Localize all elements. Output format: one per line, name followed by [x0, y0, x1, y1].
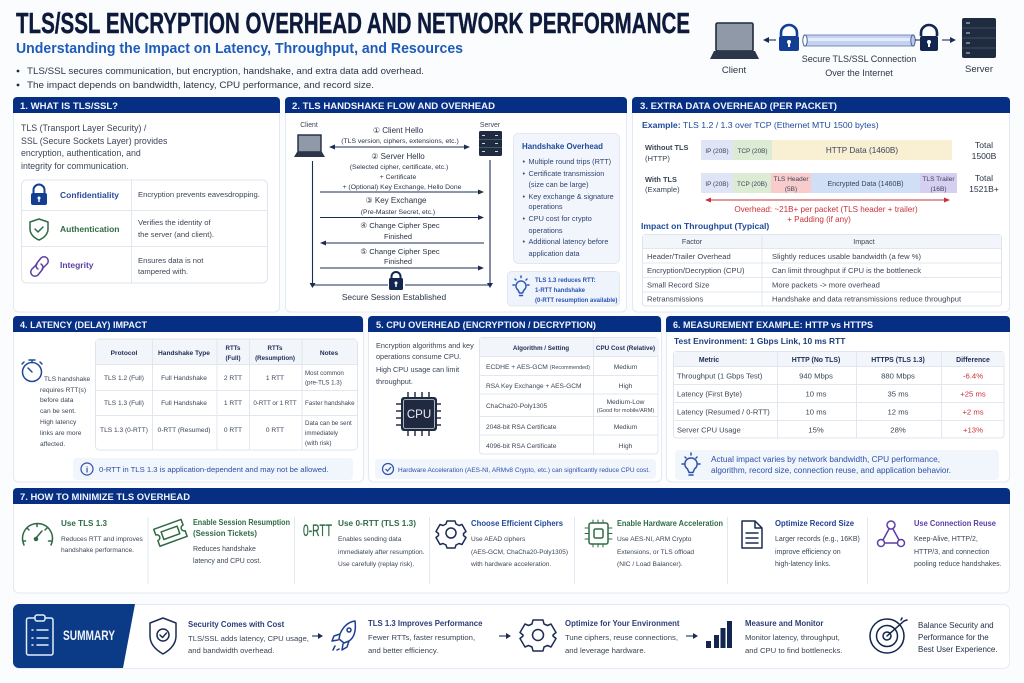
overhead note — [734, 205, 918, 224]
tip: session resumption: latency and CPU cost. — [193, 558, 261, 565]
throughput table: Small Record Size — [647, 280, 709, 290]
tip: record size: Larger records (e.g., 16KB) — [775, 536, 860, 543]
tip: hardware acceleration — [585, 519, 723, 568]
icon: ticket — [154, 519, 187, 546]
summary label block: SUMMARY — [63, 627, 115, 643]
step 3: ③ Key Exchange — [366, 196, 427, 205]
icon: light bulb — [513, 276, 529, 296]
server column: Server — [480, 122, 501, 129]
arrow — [499, 633, 511, 639]
summary: balance security and performance: Balance Security and — [918, 621, 994, 630]
icon: CPU chip: CPU — [407, 409, 431, 421]
latency table: 1 RTT — [224, 400, 242, 407]
row: integrity: Integrity — [60, 260, 94, 270]
summary: security comes with cost: and bandwidth overhead. — [188, 646, 274, 655]
latency table: (with risk) — [305, 440, 331, 447]
tip: 0-RTT: Use 0-RTT (TLS 1.3) — [338, 519, 416, 528]
connection label: Secure TLS/SSL Connection — [802, 54, 916, 64]
row: authentication: Verifies the identity of — [138, 218, 212, 227]
tip: 0-RTT: Use carefully (replay risk). — [338, 561, 414, 568]
tip: efficient ciphers — [436, 519, 568, 568]
cpu cost table: High — [619, 443, 633, 450]
summary: security comes with cost: TLS/SSL adds latency, CPU usage, — [188, 634, 309, 643]
left arrow — [763, 37, 776, 43]
step 4 — [320, 221, 484, 246]
row: integrity — [60, 256, 204, 276]
handshake overhead box: • — [522, 192, 526, 201]
tip: connection reuse: Keep-Alive, HTTP/2, — [914, 536, 978, 543]
session established label: Secure Session Established — [342, 292, 446, 302]
tip: efficient ciphers: Use AEAD ciphers — [471, 536, 526, 543]
secure connection diagram — [710, 18, 996, 78]
tip: efficient ciphers: Choose Efficient Ciphers — [471, 519, 564, 528]
cpu cost table: ECDHE + AES-GCM (Recommended) — [486, 364, 590, 371]
tip: record size — [742, 519, 860, 568]
measurement table: Latency (Resumed / 0-RTT) — [677, 408, 770, 416]
tip: efficient ciphers: with hardware acceleration. — [470, 561, 551, 568]
intro bullets: The impact depends on bandwidth, latency, CPU performance, and record size. — [27, 80, 374, 91]
packet with TLS: (Example) — [645, 185, 680, 194]
latency table: TLS 1.2 (Full) — [104, 375, 144, 382]
latency table — [95, 339, 358, 450]
step 4: Finished — [384, 232, 412, 241]
cpu explanation — [376, 341, 474, 386]
cpu cost table: ChaCha20-Poly1305 — [486, 403, 548, 410]
packet with TLS: With TLS — [645, 175, 677, 184]
heading: 6. MEASUREMENT EXAMPLE: HTTP vs HTTPS — [673, 320, 874, 331]
packet with TLS: TLS Trailer — [922, 176, 955, 183]
icon: lock — [31, 185, 47, 205]
TLS 1.3 callout — [508, 272, 620, 306]
tip: hardware acceleration: (NIC / Load Balancer). — [617, 561, 683, 568]
latency explanation: TLS handshake — [44, 376, 91, 383]
handshake overhead box: operations — [528, 226, 563, 235]
cpu cost table: CPU Cost (Relative) — [596, 345, 655, 352]
latency explanation: before data — [40, 397, 74, 404]
step 2: (Selected cipher, certificate, etc.) — [350, 164, 448, 171]
latency table: immediately — [305, 430, 339, 437]
latency table: 0-RTT (Resumed) — [158, 427, 210, 434]
summary: optimize for environment: and leverage hardware. — [565, 646, 646, 655]
throughput table: Header/Trailer Overhead — [647, 252, 731, 261]
packet without TLS: IP (20B) — [705, 148, 729, 155]
icon: shield check — [30, 219, 48, 240]
measurement table: 35 ms — [888, 390, 909, 398]
step 1: (TLS version, ciphers, extensions, etc.) — [341, 138, 459, 145]
latency table: RTTs — [225, 345, 241, 352]
step 2: ② Server Hello — [371, 152, 425, 161]
heading: 4. LATENCY (DELAY) IMPACT — [20, 320, 147, 331]
overhead note: + Padding (if any) — [787, 215, 851, 224]
icon: gauge — [22, 523, 53, 545]
tip: connection reuse: HTTP/3, and connection — [914, 549, 990, 556]
icon: light bulb — [682, 453, 700, 475]
tip: session resumption — [154, 518, 290, 565]
TLS 1.3 callout: 1-RTT handshake — [535, 288, 586, 294]
tip: hardware acceleration: Extensions, or TLS offload — [617, 549, 694, 556]
0-RTT note — [73, 458, 353, 480]
cpu cost table: 4096-bit RSA Certificate — [486, 443, 557, 450]
measurement table: HTTP (No TLS) — [792, 357, 840, 364]
summary: TLS 1.3 improves performance: TLS 1.3 Improves Performance — [368, 619, 483, 628]
throughput table: Slightly reduces usable bandwidth (a few %) — [772, 252, 921, 261]
packet with TLS: (16B) — [930, 186, 947, 193]
cpu cost table: (Good for mobile/ARM) — [597, 408, 654, 414]
cpu cost table: Medium — [614, 424, 638, 431]
packet without TLS: Total — [975, 140, 993, 150]
handshake overhead box: Key exchange & signature — [528, 192, 614, 201]
tip: connection reuse: Use Connection Reuse — [914, 519, 997, 528]
cpu cost table: Algorithm / Setting — [513, 345, 569, 352]
0-RTT note: i — [86, 464, 88, 474]
overhead note: Overhead: ~21B+ per packet (TLS header + trailer) — [734, 205, 918, 214]
right arrow — [942, 37, 956, 43]
latency explanation: High latency — [40, 419, 77, 426]
tip: 0-RTT — [303, 519, 425, 568]
latency table: Most common — [305, 370, 344, 377]
panel 6: measurement example — [666, 316, 1010, 482]
latency table: Data can be sent — [305, 420, 352, 427]
title: TLS/SSL ENCRYPTION OVERHEAD AND NETWORK PERFORMANCE — [16, 8, 690, 40]
handshake overhead box: • — [522, 237, 526, 246]
icon: client laptop — [710, 23, 759, 59]
packet with TLS: (5B) — [785, 186, 797, 193]
row: confidentiality — [60, 190, 260, 200]
measurement table: +2 ms — [962, 408, 984, 416]
arrow — [312, 633, 323, 639]
latency table: 0-RTT or 1 RTT — [253, 400, 297, 407]
throughput table: Retransmissions — [647, 294, 703, 304]
connection label — [802, 54, 916, 78]
intro text: TLS (Transport Layer Security) / — [21, 123, 147, 133]
tip: 0-RTT: Enables sending data — [338, 536, 402, 543]
intro text: SSL (Secure Sockets Layer) provides — [21, 136, 168, 146]
icon: lock blue — [779, 25, 799, 51]
summary label block — [13, 604, 135, 668]
icon: gear — [520, 620, 556, 651]
icon: chain link — [31, 257, 48, 276]
step 5: ⑤ Change Cipher Spec — [360, 247, 440, 256]
packet with TLS: TCP (20B) — [737, 181, 767, 188]
summary: measure and monitor: and CPU to find bottlenecks. — [745, 646, 842, 655]
measurement table: Latency (First Byte) — [677, 390, 743, 398]
encrypted tunnel — [803, 35, 920, 46]
measurement table: 10 ms — [806, 408, 827, 416]
heading: 7. HOW TO MINIMIZE TLS OVERHEAD — [20, 492, 190, 503]
icon: document — [742, 521, 762, 548]
client column — [294, 122, 325, 157]
intro text: encryption, authentication, and — [21, 148, 141, 158]
summary: TLS 1.3 improves performance — [332, 619, 483, 655]
tip: 0-RTT: immediately after resumption. — [338, 549, 425, 556]
latency table: TLS 1.3 (Full) — [104, 400, 144, 407]
packet without TLS: HTTP Data (1460B) — [826, 146, 898, 155]
step 4: ④ Change Cipher Spec — [360, 221, 440, 230]
handshake sequence diagram — [294, 122, 502, 302]
cpu cost table: 2048-bit RSA Certificate — [486, 424, 557, 431]
handshake overhead box: CPU cost for crypto — [528, 214, 592, 223]
summary: balance security and performance — [870, 618, 998, 654]
throughput table: Handshake and data retransmissions reduce throughput — [772, 294, 962, 304]
tip: session resumption: Enable Session Resumption — [193, 518, 290, 527]
latency table: Handshake Type — [158, 350, 210, 357]
TLS 1.3 callout: (0-RTT resumption available) — [535, 298, 617, 304]
summary: optimize for environment: Optimize for Your Environment — [565, 619, 680, 628]
packet with TLS — [645, 173, 999, 194]
packet without TLS: TCP (20B) — [737, 148, 768, 155]
icon: lock dark — [920, 25, 938, 51]
latency table: Faster handshake — [305, 400, 355, 407]
connection label: Over the Internet — [825, 68, 893, 78]
measurement table: 880 Mbps — [881, 372, 915, 380]
tip: record size: Optimize Record Size — [775, 519, 855, 528]
packet without TLS: (HTTP) — [645, 154, 670, 163]
tip: hardware acceleration: Use AES-NI, ARM Crypto — [617, 536, 692, 543]
latency explanation — [40, 376, 91, 448]
measurement table: 12 ms — [888, 408, 909, 416]
packet with TLS: Encrypted Data (1460B) — [827, 180, 904, 188]
test environment: Test Environment: 1 Gbps Link, 10 ms RTT — [674, 336, 846, 346]
icon: CPU chip — [396, 392, 441, 436]
TLS 1.3 callout: TLS 1.3 reduces RTT: — [535, 278, 596, 284]
heading: 5. CPU OVERHEAD (ENCRYPTION / DECRYPTION) — [376, 320, 596, 331]
throughput table: Encryption/Decryption (CPU) — [647, 266, 745, 275]
handshake overhead box — [514, 134, 620, 264]
tip: record size: improve efficiency on — [775, 549, 841, 556]
row: confidentiality: Encryption prevents eavesdropping. — [138, 190, 260, 199]
server label: Server — [965, 64, 993, 75]
icon: network nodes — [878, 521, 904, 546]
packet with TLS: TLS Header — [773, 176, 809, 183]
measurement table: Difference — [956, 357, 990, 364]
cpu cost table: Medium-Low — [607, 399, 645, 406]
handshake overhead box: application data — [528, 249, 581, 258]
latency table: Notes — [320, 350, 338, 357]
latency table: Full Handshake — [161, 400, 207, 407]
summary: TLS 1.3 improves performance: and better efficiency. — [368, 646, 438, 655]
row: authentication — [60, 218, 214, 239]
tip: 0-RTT: 0-RTT — [303, 521, 332, 540]
summary: TLS 1.3 improves performance: Fewer RTTs, faster resumption, — [368, 633, 475, 642]
handshake overhead box: • — [522, 157, 526, 166]
latency explanation: can be sent. — [40, 408, 76, 415]
step 5 — [320, 247, 484, 270]
icon: clipboard — [26, 615, 53, 655]
panel 4: latency impact — [13, 316, 364, 482]
step 1: ① Client Hello — [373, 126, 424, 135]
summary: optimize for environment: Tune ciphers, reuse connections, — [565, 633, 678, 642]
latency table: TLS 1.3 (0-RTT) — [100, 427, 148, 434]
summary: measure and monitor: Measure and Monitor — [745, 619, 823, 628]
summary: balance security and performance: Performance for the — [918, 633, 989, 642]
intro text — [21, 123, 168, 171]
server column — [479, 122, 502, 156]
tip: use TLS 1.3: handshake performance. — [61, 547, 134, 554]
latency table: (pre-TLS 1.3) — [305, 380, 342, 386]
latency explanation: requires RTT(s) — [40, 387, 86, 394]
heading: 2. TLS HANDSHAKE FLOW AND OVERHEAD — [292, 101, 495, 112]
step 3 — [320, 196, 484, 220]
latency table: 0 RTT — [266, 427, 284, 434]
0-RTT note: 0-RTT in TLS 1.3 is application-dependent and may not be allowed. — [99, 465, 328, 474]
measurement table: -6.4% — [963, 372, 983, 380]
throughput table: Can limit throughput if CPU is the bottleneck — [772, 266, 921, 275]
intro text: integrity for communication. — [21, 161, 129, 171]
icon: green chip — [585, 520, 612, 547]
properties table — [21, 180, 268, 283]
tip: session resumption: (Session Tickets) — [193, 529, 257, 538]
cpu cost table: RSA Key Exchange + AES-GCM — [486, 383, 581, 390]
latency table: 2 RTT — [224, 375, 242, 382]
handshake overhead box: Multiple round trips (RTT) — [528, 157, 611, 166]
row: integrity: Ensures data is not — [138, 256, 204, 265]
lifelines — [310, 160, 493, 288]
impact note — [675, 450, 999, 480]
latency table: Full Handshake — [161, 375, 207, 382]
cpu explanation: Encryption algorithms and key — [376, 341, 474, 350]
tip: connection reuse: pooling reduce handshakes. — [914, 561, 1002, 568]
intro bullets: TLS/SSL secures communication, but encryption, handshake, and extra data add overhead. — [27, 66, 424, 77]
tip: use TLS 1.3 — [22, 519, 144, 554]
cpu explanation: throughput. — [376, 377, 413, 386]
tip: hardware acceleration: Enable Hardware Acceleration — [617, 519, 723, 528]
step 2: + (Optional) Key Exchange, Hello Done — [343, 184, 462, 191]
hardware acceleration note — [375, 459, 656, 479]
handshake overhead box: (size can be large) — [528, 180, 589, 189]
throughput table — [642, 234, 1002, 306]
hardware acceleration note: Hardware Acceleration (AES-NI, ARMv8 Crypto, etc.) can significantly reduce CPU cost. — [398, 467, 650, 474]
tip: use TLS 1.3: Use TLS 1.3 — [61, 519, 108, 528]
panel 2: handshake flow — [285, 97, 627, 312]
cpu explanation: operations consume CPU. — [376, 352, 461, 361]
packet with TLS: Total — [975, 173, 993, 183]
example line: Example: TLS 1.2 / 1.3 over TCP (Ethernet MTU 1500 bytes) — [642, 120, 879, 130]
step 3: (Pre-Master Secret, etc.) — [361, 209, 435, 216]
throughput table: Impact — [853, 237, 875, 246]
step 2 — [320, 152, 484, 194]
latency table: 0 RTT — [224, 427, 242, 434]
icon: bars — [706, 621, 732, 648]
icon: gear — [436, 521, 466, 548]
panel 7: how to minimize overhead — [13, 488, 1010, 593]
latency explanation: affected. — [40, 441, 65, 448]
measurement table — [673, 351, 1004, 438]
icon: server — [962, 18, 996, 58]
measurement table: Throughput (1 Gbps Test) — [677, 372, 763, 380]
handshake overhead box: • — [522, 214, 526, 223]
summary: balance security and performance: Best User Experience. — [918, 645, 998, 654]
packet without TLS: Without TLS — [645, 143, 689, 152]
latency table: (Full) — [225, 355, 241, 362]
icon: shield — [150, 618, 176, 654]
icon: rocket — [332, 621, 355, 650]
icon: stopwatch — [22, 360, 42, 382]
row: authentication: Authentication — [60, 224, 120, 234]
measurement table: 940 Mbps — [799, 372, 833, 380]
summary: measure and monitor — [706, 619, 842, 655]
summary: optimize for environment — [520, 619, 680, 655]
icon: target — [870, 618, 907, 653]
panel 1: what is TLS/SSL — [13, 97, 280, 312]
intro bullets — [17, 66, 424, 91]
overhead arrow — [705, 198, 950, 202]
step 2: + Certificate — [380, 174, 416, 181]
client column: Client — [300, 122, 318, 129]
packet with TLS: IP (20B) — [705, 181, 729, 188]
packet without TLS — [645, 140, 997, 163]
panel 5: CPU overhead — [368, 316, 662, 482]
latency table: (Resumption) — [255, 355, 295, 362]
measurement table: Metric — [699, 357, 719, 364]
client label: Client — [722, 65, 747, 76]
cpu explanation: High CPU usage can limit — [376, 365, 459, 374]
heading: 1. WHAT IS TLS/SSL? — [20, 101, 118, 112]
packet with TLS: 1521B+ — [969, 184, 999, 194]
tip: session resumption: Reduces handshake — [193, 546, 256, 553]
cpu cost table: Medium — [614, 364, 638, 371]
measurement table: +25 ms — [960, 390, 986, 398]
arrow — [686, 633, 698, 639]
latency table: 1 RTT — [266, 375, 284, 382]
measurement table: Server CPU Usage — [677, 426, 741, 434]
measurement table: 28% — [890, 426, 906, 434]
packet without TLS: 1500B — [972, 151, 997, 161]
summary: security comes with cost: Security Comes with Cost — [188, 620, 285, 629]
tip: connection reuse — [878, 519, 1002, 568]
row: authentication: the server (and client). — [138, 230, 214, 239]
throughput table: Factor — [682, 237, 703, 246]
measurement table: +13% — [963, 426, 983, 434]
impact note: algorithm, record size, connection reuse, and application behavior. — [711, 466, 951, 475]
heading: 3. EXTRA DATA OVERHEAD (PER PACKET) — [640, 101, 837, 112]
handshake overhead box: Additional latency before — [528, 237, 608, 246]
row: integrity: tampered with. — [138, 267, 188, 276]
tip: use TLS 1.3: Reduces RTT and improves — [61, 536, 144, 543]
row: confidentiality: Confidentiality — [60, 190, 119, 200]
summary band — [13, 604, 1010, 668]
cpu cost table — [479, 337, 658, 454]
subtitle: Understanding the Impact on Latency, Throughput, and Resources — [16, 41, 463, 57]
step 5: Finished — [384, 257, 412, 266]
handshake overhead box: Handshake Overhead — [522, 142, 603, 151]
handshake overhead box: Certificate transmission — [528, 169, 604, 178]
summary: security comes with cost — [150, 618, 309, 655]
cpu cost table: High — [619, 383, 633, 390]
measurement table: 15% — [808, 426, 824, 434]
icon: session lock — [389, 272, 403, 290]
summary: measure and monitor: Monitor latency, throughput, — [745, 633, 840, 642]
panel 3: extra data overhead — [632, 97, 1010, 312]
tip: efficient ciphers: (AES-GCM, ChaCha20-Poly1305) — [471, 549, 568, 556]
latency table: Protocol — [111, 350, 138, 357]
measurement table: HTTPS (TLS 1.3) — [871, 357, 925, 364]
latency table: RTTs — [267, 345, 283, 352]
step 1 — [329, 126, 470, 150]
handshake overhead box: operations — [528, 202, 563, 211]
throughput heading: Impact on Throughput (Typical) — [641, 221, 769, 231]
impact note: Actual impact varies by network bandwidth, CPU performance, — [711, 455, 940, 464]
measurement table: 10 ms — [806, 390, 827, 398]
throughput table: More packets -> more overhead — [772, 280, 880, 290]
tip: record size: high-latency links. — [775, 561, 831, 568]
latency explanation: links are more — [40, 430, 82, 437]
handshake overhead box: • — [522, 169, 526, 178]
